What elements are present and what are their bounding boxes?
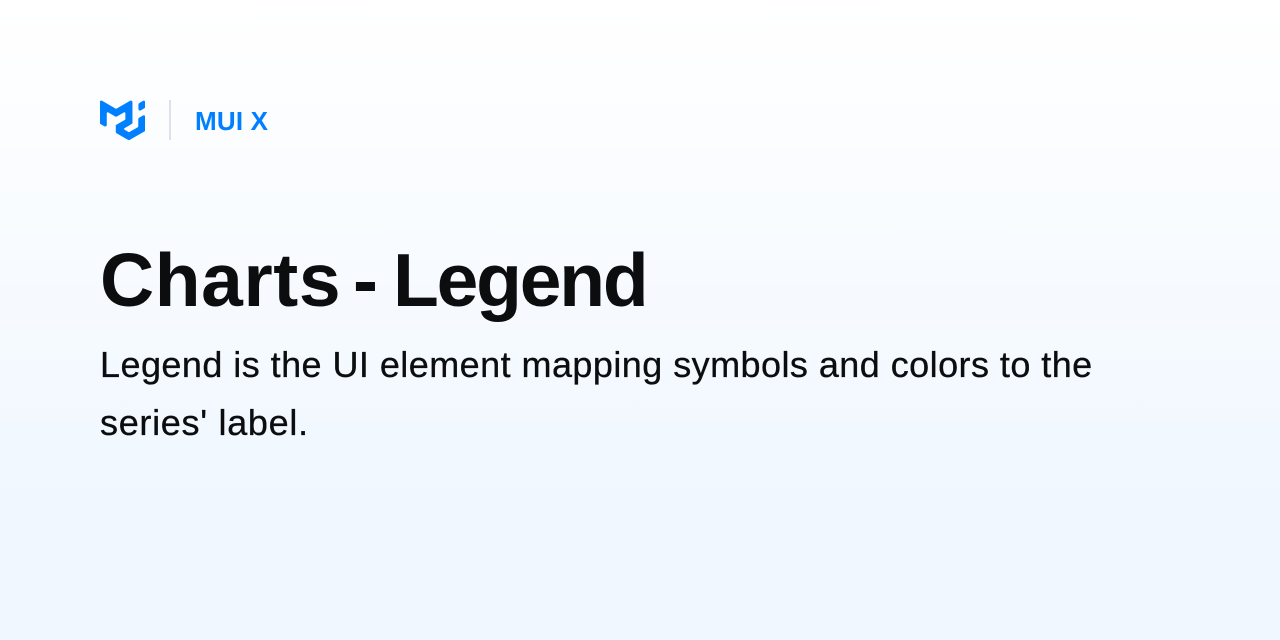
brand name: MUI X — [195, 106, 268, 136]
icon: MUI logo — [100, 100, 145, 140]
subtitle: series' label. — [100, 402, 309, 442]
title: Charts — [100, 238, 341, 322]
title: Legend — [393, 238, 646, 322]
subtitle: Legend is the UI element mapping symbols and colors to the — [100, 344, 1093, 384]
title: - — [353, 238, 378, 322]
subtitle — [100, 344, 1093, 442]
title — [100, 238, 646, 322]
header: brand — [100, 100, 268, 140]
